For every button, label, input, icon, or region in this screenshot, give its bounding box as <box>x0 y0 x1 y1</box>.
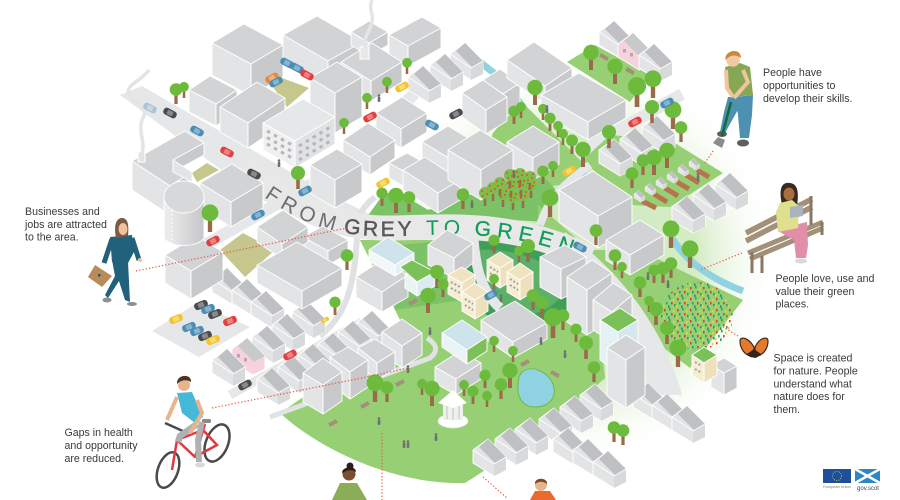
text: skills: develop their skills. <box>763 93 852 105</box>
cylindrical tower <box>164 181 204 246</box>
text: green places: value their green <box>776 286 855 298</box>
logo: gov.scot saltire <box>855 469 880 492</box>
figure: gardener with spade <box>713 51 753 148</box>
text: gaps: and opportunity <box>64 440 138 452</box>
green roof tower <box>600 308 638 372</box>
callout leader lines <box>136 151 742 500</box>
olive plots <box>192 78 309 277</box>
text: green places: People love, use and <box>776 273 875 285</box>
text: businesses: Businesses and <box>25 206 100 218</box>
factory chimney and smoke <box>128 0 372 162</box>
text: gaps: are reduced. <box>64 453 124 465</box>
title along the arc: FROMGREY TO GREEN <box>266 186 574 248</box>
cars <box>142 57 675 391</box>
city buildings <box>132 16 737 414</box>
text: nature: Space is created <box>774 352 853 364</box>
pond <box>518 369 554 407</box>
logo: gov.scot saltire: gov.scot <box>857 486 879 492</box>
figure: businesswoman with briefcase <box>88 218 142 306</box>
text: businesses: to the area. <box>25 232 79 244</box>
meadow of wildflowers <box>661 282 733 350</box>
cream apartment blocks <box>448 252 717 383</box>
figure: man at bottom <box>530 479 556 500</box>
text: green places: places. <box>776 298 809 310</box>
river <box>480 62 743 291</box>
text: skills: People have <box>763 67 822 79</box>
text: businesses: jobs are attracted <box>24 219 107 231</box>
text: nature: nature does for <box>774 391 845 403</box>
park benches and small people <box>278 53 699 448</box>
banner band <box>240 165 682 395</box>
logo: European Union: European Union <box>823 485 851 489</box>
icon: butterfly <box>740 338 768 358</box>
background glow of green <box>370 55 780 465</box>
gazebo <box>438 390 468 428</box>
text: skills: opportunities to <box>763 80 836 92</box>
office block with windows <box>263 99 335 168</box>
figure: woman reading on bench <box>746 183 823 273</box>
text: nature: them. <box>774 404 800 416</box>
streets and roads <box>120 62 682 395</box>
allotment beds <box>642 170 709 208</box>
logo: European Union <box>823 469 851 489</box>
terraced houses <box>212 21 748 488</box>
green spaces <box>270 45 743 483</box>
glass and green roof buildings <box>369 237 487 364</box>
figure: cyclist on red bicycle <box>152 376 235 491</box>
tall grey tower <box>607 335 645 408</box>
figure: woman at bottom <box>332 462 367 500</box>
text: nature: for nature. People <box>774 366 858 378</box>
allotment sheds <box>634 158 700 202</box>
orchard <box>479 168 537 210</box>
trees <box>170 45 698 445</box>
text: gaps: Gaps in health <box>64 427 133 439</box>
text: nature: understand what <box>774 378 852 390</box>
